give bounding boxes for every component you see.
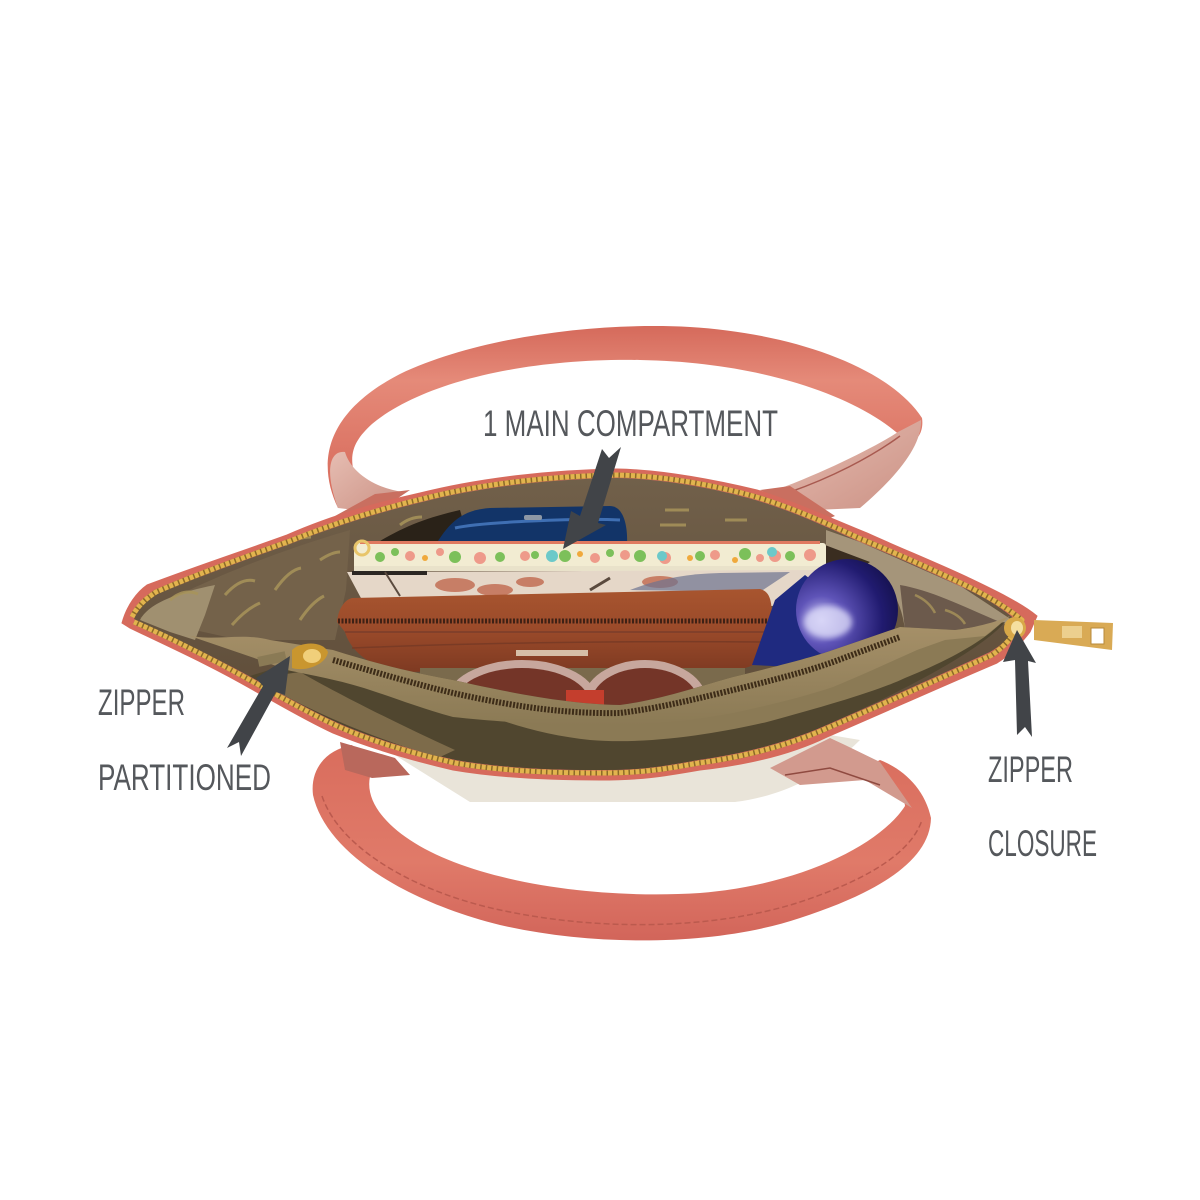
dark back shadow	[372, 510, 470, 546]
zipper pull	[1004, 617, 1113, 650]
bag interior lining	[134, 478, 1018, 770]
label: zipper closure line 2: CLOSURE	[988, 823, 1097, 864]
bottom handle	[313, 738, 931, 940]
label: 1 main compartment: 1 MAIN COMPARTMENT	[483, 403, 778, 444]
left lining wedge	[140, 530, 350, 640]
pocket lower khaki left	[258, 672, 455, 757]
arrow: main compartment	[563, 447, 621, 549]
handle base right	[776, 420, 921, 510]
wallet	[337, 589, 772, 672]
lining logo print	[170, 510, 747, 625]
arrow: zipper closure	[1003, 630, 1036, 737]
glasses logo	[516, 650, 588, 656]
gold zipper teeth	[132, 475, 1022, 773]
blue jar	[752, 559, 898, 670]
printed notebook	[347, 570, 832, 606]
pocket zip slider	[292, 644, 328, 669]
pocket zipper tape	[333, 637, 900, 713]
pocket lower tan	[480, 622, 1002, 741]
pocket lip band	[187, 616, 1010, 725]
notebook zipper ring	[355, 541, 369, 555]
sunglasses	[420, 650, 745, 744]
label: zipper partitioned line 2: PARTITIONED	[98, 757, 271, 798]
arrow: zipper partitioned	[227, 656, 290, 756]
pocket base dark	[250, 622, 1005, 770]
top handle	[328, 326, 922, 522]
floral notebook	[354, 541, 826, 571]
phone	[436, 506, 627, 545]
right lining	[826, 530, 1015, 630]
handle base left	[330, 452, 404, 512]
lower bag body	[390, 700, 860, 802]
label: zipper partitioned line 1: ZIPPER	[98, 682, 185, 723]
bag rim	[122, 469, 1037, 780]
label: zipper closure line 1: ZIPPER	[988, 749, 1073, 790]
front zip pocket	[187, 616, 1010, 770]
